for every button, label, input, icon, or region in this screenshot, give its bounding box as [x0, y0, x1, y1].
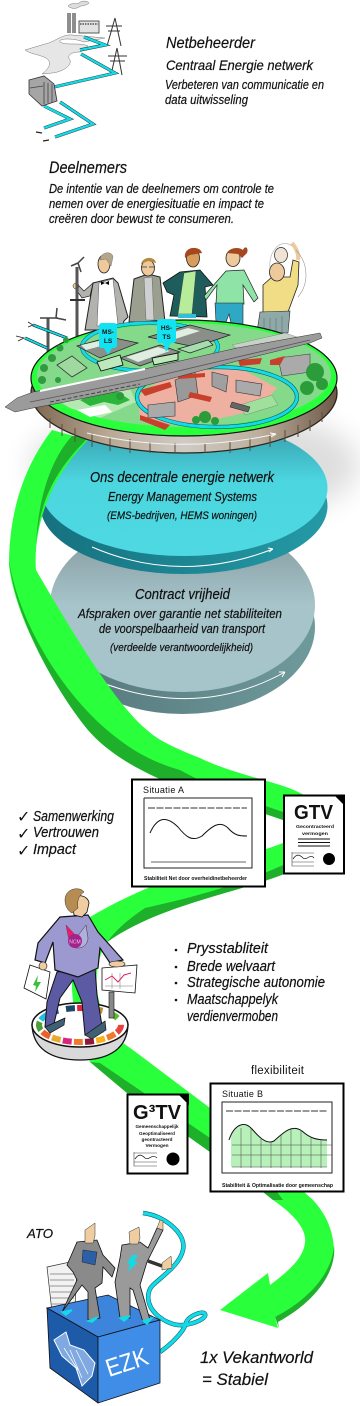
text: decentral network — [90, 470, 275, 522]
tag: HS-TS — [157, 319, 176, 352]
arrow: gray disc rotation — [90, 672, 285, 699]
tag: HS-TS: HS- — [161, 325, 172, 332]
white map on cube — [54, 1332, 95, 1386]
checklist: cooperation, trust, impact: Impact — [33, 842, 77, 858]
document: G3TV — [128, 1094, 189, 1174]
shoes — [45, 1018, 106, 1039]
platform — [32, 1003, 128, 1060]
checklist: cooperation, trust, impact: ✓ — [17, 809, 30, 826]
bullet list: benefits: Brede welvaart — [187, 959, 276, 975]
soft shadow around discs — [30, 405, 360, 525]
panel: Situatie A chart — [132, 780, 265, 886]
cube and officials: EZK — [47, 1213, 205, 1403]
text: decentral network: Ons decentrale energie netwerk — [90, 470, 275, 486]
illustration: central energy grid — [25, 1, 127, 141]
cable — [143, 1213, 205, 1352]
NCM badge — [66, 925, 88, 948]
earth disc: neighbourhood — [5, 319, 337, 453]
heading: Deelnemers: Deelnemers — [49, 158, 127, 177]
arrow: cyan disc rotation — [92, 547, 273, 567]
text block: intention of participants: creëren door bewust te consumeren. — [49, 212, 234, 226]
text: 1x Vekantworld = Stabiel: = Stabiel — [202, 1370, 269, 1389]
documents in hand — [24, 962, 50, 999]
NCM badge: NCM — [69, 940, 81, 946]
paper stack — [47, 1262, 77, 1312]
cube top — [47, 1295, 160, 1337]
hand on board — [109, 961, 125, 967]
text block: intention of participants: De intentie van de deelnemers om controle te — [49, 182, 274, 196]
turbines — [16, 257, 85, 360]
legs — [45, 968, 103, 1035]
panel: decentral energy network disc — [40, 420, 328, 574]
person: older couple in yellow — [257, 243, 306, 333]
panel: Situatie A chart: Stabiliteit Net door overheidinetbeheerder — [144, 876, 247, 882]
text: contract freedom: Afspraken over garantie net stabiliteiten — [77, 607, 282, 621]
document: GTV: Gecontracteerd — [296, 824, 334, 829]
person: man in gray suit — [73, 253, 128, 330]
checklist: cooperation, trust, impact: ✓ — [17, 843, 30, 860]
tag: HS-TS: TS — [162, 334, 171, 341]
person: regulator on SDG platform — [24, 889, 137, 1060]
cyan ring upper — [82, 323, 218, 371]
head — [65, 889, 89, 917]
text: decentral network: Energy Management Systems — [108, 490, 257, 504]
document: GTV — [284, 795, 345, 874]
text: 1x Vekantworld = Stabiel: 1x Vekantworld — [200, 1348, 314, 1367]
text: contract freedom: de voorspelbaarheid van transport — [99, 622, 265, 636]
document: G3TV: G³TV — [133, 1102, 182, 1124]
EZK label: EZK — [102, 1343, 152, 1383]
checklist: cooperation, trust, impact: Vertrouwen — [33, 825, 99, 841]
panel: Situatie A chart: Situatie A — [143, 785, 184, 795]
document: G3TV: Gemeenschappelijk — [136, 1124, 179, 1129]
disc surface — [31, 320, 337, 436]
tag: MS-LS: LS — [104, 338, 113, 345]
bullet list: benefits: Maatschappelyk — [187, 992, 279, 1008]
heading: Netbeheerder: Netbeheerder — [166, 35, 256, 52]
text: contract freedom — [77, 587, 282, 654]
person: man in teal jacket — [163, 248, 213, 318]
document: G3TV: Vermogen — [146, 1143, 169, 1148]
document: G3TV: geontracteerd — [142, 1137, 173, 1142]
highway — [5, 333, 322, 412]
cube left face — [47, 1308, 98, 1403]
arrow: green ribbon — [9, 430, 334, 1328]
text block: intention of participants: nemen over de energiesituatie en impact te — [49, 197, 264, 211]
tag: MS-LS: MS- — [102, 329, 114, 336]
text block: communication: data uitwisseling — [165, 93, 248, 107]
chart board — [102, 965, 137, 1018]
person: man with glasses — [129, 258, 165, 322]
checklist: cooperation, trust, impact: Samenwerking — [33, 809, 114, 825]
checklist: cooperation, trust, impact: ✓ — [17, 826, 30, 843]
text: 1x Vekantworld = Stabiel — [200, 1348, 314, 1389]
bullet list: benefits: verdienvermoben — [187, 1009, 278, 1025]
label: flexibiliteit: flexibiliteit — [251, 1065, 305, 1077]
upper buildings — [38, 325, 297, 384]
tag: MS-LS — [99, 323, 117, 355]
jacket — [35, 915, 123, 977]
panel: Situatie B chart: Situatie B — [222, 1089, 263, 1099]
document: GTV: vermogen — [302, 831, 328, 836]
official left — [62, 1223, 115, 1322]
official right — [115, 1220, 172, 1324]
cube right face — [98, 1320, 160, 1403]
text: contract freedom: Contract vrijheid — [135, 587, 231, 603]
cyan ring lower — [137, 367, 297, 427]
bullet list: benefits: Prysstabliteit — [187, 941, 269, 957]
subheading: Centraal Energie netwerk: Centraal Energie netwerk — [166, 57, 314, 73]
bullet list: benefits: Strategische autonomie — [187, 975, 325, 991]
text block: communication: Verbeteren van communicatie en — [165, 78, 324, 92]
panel: Situatie B chart: Stabiliteit & Optimalisatie door gemeenschap — [222, 1183, 333, 1189]
panel: Situatie B chart — [210, 1084, 344, 1192]
person: woman in mint sweater — [204, 247, 258, 324]
pink town ground — [138, 368, 277, 426]
text block: communication — [165, 78, 324, 107]
panel: contract freedom disc — [50, 518, 315, 714]
text: contract freedom: (verdeelde verantwoordelijkheid) — [110, 642, 253, 654]
document: G3TV: Geoptimaliseerd — [139, 1131, 175, 1136]
text block: intention of participants — [49, 182, 274, 226]
people: participants — [73, 243, 306, 333]
disc rim — [31, 333, 337, 453]
lower town buildings — [52, 354, 328, 430]
checklist: cooperation, trust, impact — [17, 809, 114, 860]
document: GTV: GTV — [294, 802, 334, 824]
text: decentral network: (EMS-bedrijven, HEMS woningen) — [107, 510, 257, 522]
label: ATO: ATO — [26, 1226, 53, 1241]
bullet list: benefits — [175, 941, 325, 1025]
